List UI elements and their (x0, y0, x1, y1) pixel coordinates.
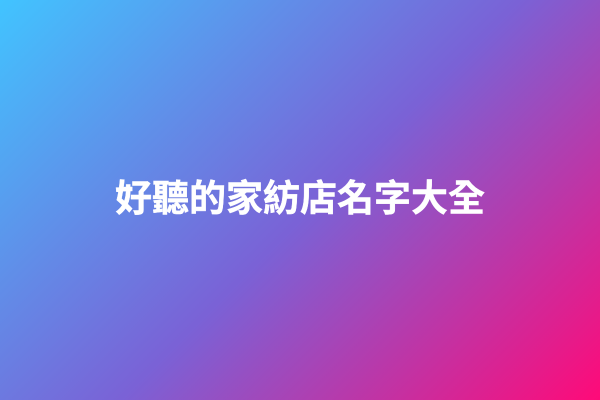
title: 好聽的家紡店名字大全 (115, 178, 485, 219)
